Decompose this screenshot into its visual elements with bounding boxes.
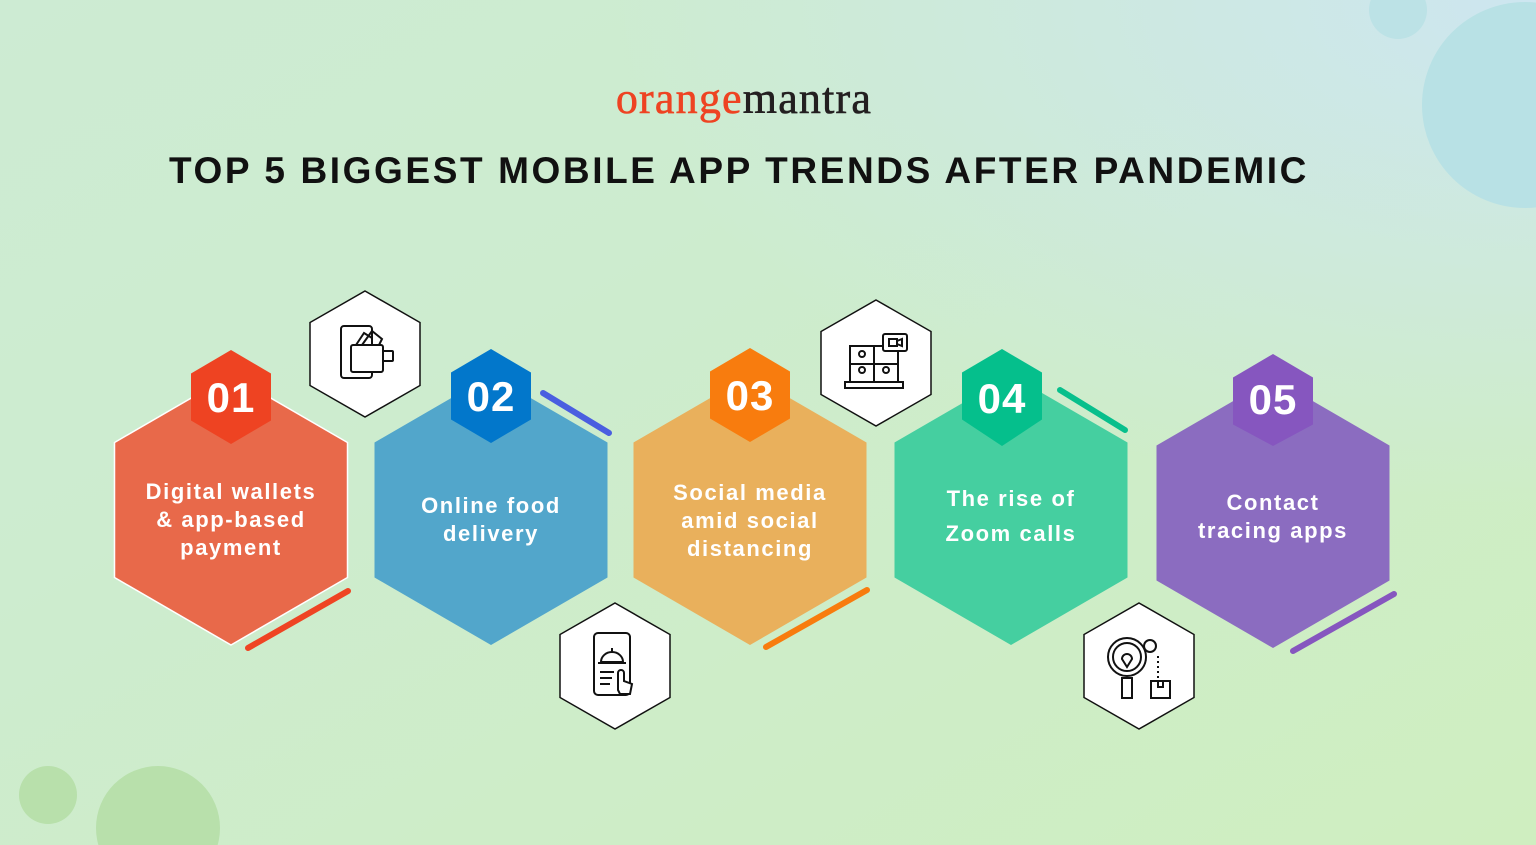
title: TOP 5 BIGGEST MOBILE APP TRENDS AFTER PANDEMIC [169,150,1309,191]
panel: 01 digital wallets: payment [180,535,282,560]
panel: 04 zoom calls: Zoom calls [946,521,1076,546]
panel: 02 online food delivery [374,349,608,645]
accent lines [248,390,1394,651]
logo: orangemantra [616,74,872,123]
icon: video call laptop [821,300,931,426]
icon: contact tracing magnifier [1084,603,1194,729]
icon: food delivery phone [560,603,670,729]
panel: 02 online food delivery: delivery [443,521,539,546]
panel: 01 digital wallets: Digital wallets [146,479,316,504]
panel: 03 social media: amid social [681,508,819,533]
panel: 03 social media: Social media [673,480,827,505]
icon: phone wallet [310,291,420,417]
panel: 03 social media [634,348,866,645]
panel: 01 digital wallets [114,350,348,645]
panel: 01 digital wallets: 01 [207,374,255,421]
panel: 04 zoom calls: 04 [978,375,1026,422]
panel: 03 social media: distancing [687,536,813,561]
panel: 05 contact tracing [1156,354,1390,648]
panel: 04 zoom calls: The rise of [947,486,1075,511]
panel: 05 contact tracing: Contact [1226,490,1320,515]
panel: 05 contact tracing: 05 [1249,376,1297,423]
panel: 01 digital wallets: & app-based [156,507,306,532]
panel: 02 online food delivery: Online food [421,493,561,518]
panel: 04 zoom calls [894,349,1128,645]
panel: 03 social media: 03 [726,372,774,419]
panel: 05 contact tracing: tracing apps [1198,518,1348,543]
panel: 02 online food delivery: 02 [467,373,515,420]
